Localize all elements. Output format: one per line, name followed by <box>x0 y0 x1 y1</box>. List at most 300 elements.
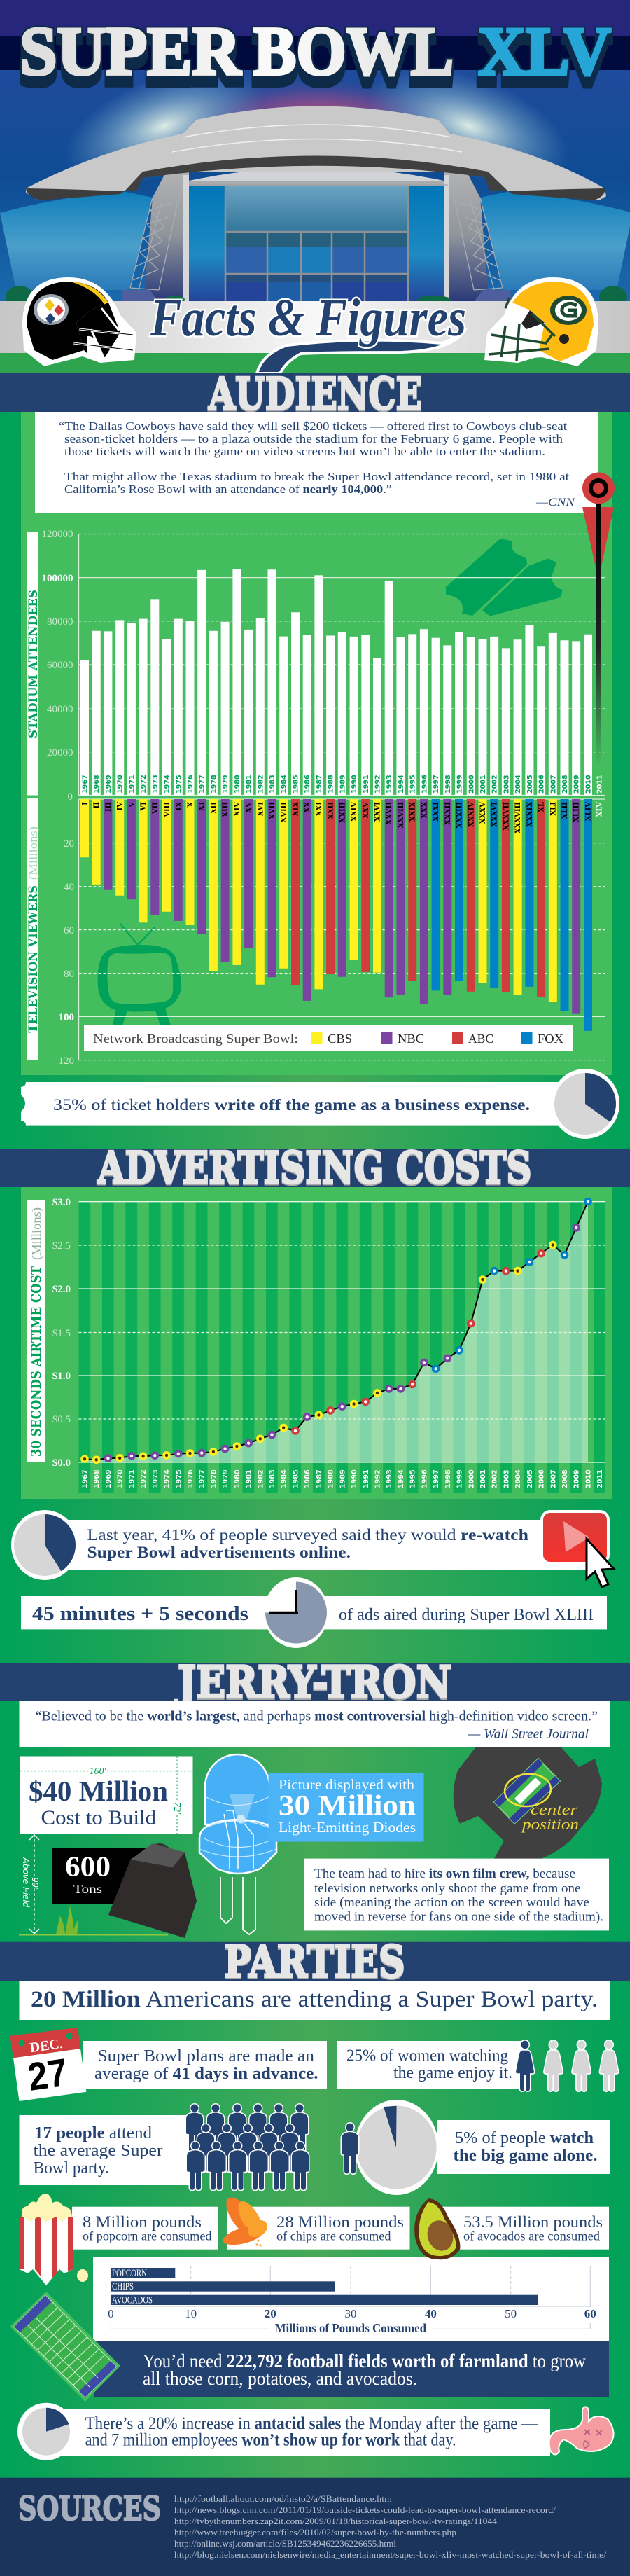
advertising heading: ADVERTISING COSTS <box>97 1142 532 1193</box>
year labels: 1980 <box>234 775 241 794</box>
year labels: 1984 <box>281 1469 288 1488</box>
title: SUPER <box>20 13 241 90</box>
x axis labels: 40 <box>425 2307 437 2320</box>
pie: 35 percent <box>551 1069 620 1139</box>
y axis labels: 80000 <box>47 616 73 628</box>
data points <box>82 1199 591 1462</box>
super bowl numerals: IX <box>175 802 183 810</box>
axis title: airtime cost <box>27 1200 46 1462</box>
year labels: 1974 <box>164 1469 171 1488</box>
film crew text box: television networks only shoot the game from one <box>314 1881 581 1896</box>
year labels: 1975 <box>175 1469 183 1488</box>
antacid callout: and 7 million employees won’t show up for work that day. <box>85 2431 456 2450</box>
year labels: 1993 <box>386 775 393 794</box>
title <box>20 13 611 90</box>
pounds consumed bar chart: Millions of Pounds Consumed <box>275 2321 426 2335</box>
year labels: 1969 <box>105 1469 113 1488</box>
axis title: television viewers: TELEVISION VIEWERS <box>27 885 41 1033</box>
super bowl numerals: XXVIII <box>398 802 405 828</box>
women enjoying box <box>337 2041 618 2091</box>
year labels: 1989 <box>339 1469 346 1488</box>
year labels: 2011 <box>596 1469 604 1488</box>
year labels: 1999 <box>456 775 463 794</box>
year labels: 1974 <box>164 775 171 794</box>
year labels: 2008 <box>561 775 569 794</box>
year labels: 1971 <box>128 1469 136 1488</box>
green section background <box>0 1663 630 1943</box>
year labels: 1986 <box>304 1469 312 1488</box>
year labels: 1972 <box>140 775 148 794</box>
super bowl numerals: XII <box>210 802 218 814</box>
year labels: 1984 <box>281 775 288 794</box>
icon: weight <box>108 1843 197 1938</box>
y axis labels: 20000 <box>47 747 73 759</box>
green section background <box>0 1149 630 1663</box>
swoosh <box>257 328 466 373</box>
weight box: Tons <box>74 1882 102 1896</box>
year labels: 2006 <box>538 1469 546 1488</box>
abc bars <box>291 799 545 997</box>
bar labels: CHIPS <box>112 2281 134 2292</box>
people per party box: the average Super <box>34 2142 162 2160</box>
year labels: 1972 <box>140 1469 148 1488</box>
year labels: 1967 <box>81 775 90 794</box>
year labels: 1995 <box>410 775 417 794</box>
super bowl numerals: XXVII <box>386 802 393 825</box>
bar labels <box>112 2268 153 2306</box>
x axis labels: 60 <box>584 2307 596 2320</box>
year labels: 1992 <box>374 775 382 794</box>
height above field marker <box>21 1834 41 1934</box>
icon: screen position blob: center <box>531 1801 578 1818</box>
super bowl numerals: XIV <box>234 802 241 816</box>
year labels: 1999 <box>456 1469 463 1488</box>
super bowl numerals: X <box>187 802 195 808</box>
parties heading bar <box>0 1942 630 1981</box>
year labels: 1971 <box>128 775 136 794</box>
axis title: television viewers: (Millions) <box>27 826 40 880</box>
super bowl numerals: XVIII <box>281 802 288 823</box>
super bowl numerals: IV <box>117 802 125 810</box>
cost to build box <box>20 1757 193 1834</box>
year labels: 1978 <box>210 1469 218 1488</box>
super bowl numerals: XXXIII <box>456 802 463 828</box>
y axis labels: 120 <box>59 1055 74 1067</box>
quote box: That might allow the Texas stadium to break the Super Bowl attendance record, set in 1980 at <box>64 470 569 483</box>
super bowl numerals: XLI <box>550 802 557 815</box>
cbs bars <box>80 799 557 1002</box>
sources list: http://football.about.com/od/histo2/a/SBattendance.htm <box>174 2493 392 2504</box>
super bowl numerals: XL <box>538 802 546 812</box>
x axis labels <box>108 2307 596 2320</box>
x axis labels: 30 <box>344 2307 357 2320</box>
year labels: 2001 <box>479 1469 487 1488</box>
led callout box <box>269 1773 424 1842</box>
year labels: 2002 <box>491 1469 499 1488</box>
year labels: 2005 <box>526 775 534 794</box>
year labels: 2006 <box>538 775 546 794</box>
bars <box>111 2268 538 2305</box>
callout: ad minutes <box>21 1577 607 1648</box>
axis title: television viewers <box>27 798 41 1060</box>
chips stat: of chips are consumed <box>276 2229 391 2243</box>
super bowl numerals: VIII <box>164 802 171 818</box>
year labels: 1983 <box>269 1469 276 1488</box>
year labels: 1994 <box>398 775 405 794</box>
callout: re-watch ads: Super Bowl advertisements online. <box>87 1544 351 1561</box>
led callout box: 30 Million <box>279 1789 416 1821</box>
sources list: http://blog.nielsen.com/nielsenwire/media_entertainment/super-bowl-xliv-most-watched-super-bowl-of-all-time/ <box>174 2549 606 2560</box>
year labels: 1996 <box>421 775 428 794</box>
year labels: 1987 <box>316 1469 323 1488</box>
year labels: 2010 <box>585 775 592 794</box>
year labels: 1970 <box>117 1469 125 1488</box>
television viewers chart <box>27 798 605 1067</box>
attendance bars <box>80 569 592 796</box>
year labels: 1985 <box>293 775 300 794</box>
parties heading: PARTIES <box>224 1936 405 1988</box>
year labels: 1967 <box>81 1469 90 1488</box>
super bowl numerals: XXXI <box>433 802 440 822</box>
green section background <box>0 373 630 1149</box>
year labels: 1992 <box>374 1469 382 1488</box>
super bowl numerals: XIII <box>222 802 230 817</box>
year labels: 1994 <box>398 1469 405 1488</box>
icon: four women <box>516 2041 618 2091</box>
y axis labels: 60 <box>64 925 74 936</box>
x axis labels: 20 <box>265 2307 276 2320</box>
legend: network broadcasting: CBS <box>328 1032 352 1046</box>
callout: re-watch ads <box>11 1510 614 1587</box>
cost to build box: 72′ <box>172 1802 182 1815</box>
sources list: http://www.treehugger.com/files/2010/02/super-bowl-by-the-numbers.php <box>174 2527 456 2537</box>
film crew text box: The team had to hire its own film crew, because <box>314 1867 575 1881</box>
year labels: 1969 <box>105 775 113 794</box>
callout: ad minutes: 45 minutes + 5 seconds <box>32 1603 248 1625</box>
chips stat: 28 Million pounds <box>276 2213 404 2231</box>
super bowl numerals: XXXIX <box>526 802 534 827</box>
year labels: 1970 <box>117 775 125 794</box>
icon: calendar: 27 <box>25 2050 70 2099</box>
y axis labels: $2.0 <box>52 1284 71 1295</box>
super bowl numerals: XXXV <box>479 802 487 824</box>
year labels: 2002 <box>491 775 499 794</box>
sources list: http://online.wsj.com/article/SB125349462236226655.html <box>174 2538 396 2549</box>
sources heading: SOURCES <box>18 2489 161 2528</box>
super bowl numerals: XXV <box>363 802 370 818</box>
sources list <box>174 2493 606 2560</box>
year labels: 1990 <box>351 1469 358 1488</box>
super bowl numerals: XXII <box>328 802 335 819</box>
quote box: — Wall Street Journal <box>468 1726 589 1741</box>
super bowl numerals: XXI <box>316 802 323 816</box>
year labels: 1991 <box>363 1469 370 1488</box>
year labels: 1977 <box>199 1469 206 1488</box>
bar labels: POPCORN <box>112 2268 147 2279</box>
pie: 41 percent <box>11 1510 78 1580</box>
super bowl numerals: XLIV <box>585 802 592 821</box>
super bowl numerals: XLIII <box>573 802 581 822</box>
y axis labels: $0.0 <box>52 1457 71 1469</box>
year labels: 1978 <box>210 775 218 794</box>
super bowl numerals: XXVI <box>374 802 382 822</box>
icon: steelers helmet <box>22 277 136 366</box>
cost line <box>85 1202 588 1460</box>
y axis labels: $1.0 <box>52 1371 71 1382</box>
chips stat <box>227 2207 410 2250</box>
year labels: 1991 <box>363 775 370 794</box>
x axis labels: 10 <box>185 2307 197 2320</box>
year labels: 1981 <box>246 775 253 794</box>
weight box: 600 <box>65 1850 111 1883</box>
party planning box <box>83 2041 327 2089</box>
super bowl numerals: II <box>93 802 101 808</box>
watching alone box <box>342 2100 610 2195</box>
quote box: “The Dallas Cowboys have said they will sell $200 tickets — offered first to Cowboys club-seat <box>59 420 567 433</box>
nbc bars <box>104 799 580 1014</box>
super bowl numerals: XXXIV <box>468 802 475 827</box>
super bowl numerals: V <box>128 802 136 808</box>
icon: pylon <box>582 472 615 766</box>
year labels: 1982 <box>257 1469 265 1488</box>
y axis labels: 100 <box>59 1012 74 1023</box>
year labels: 1993 <box>386 1469 393 1488</box>
quote box: —CNN <box>536 497 576 508</box>
film crew text box <box>304 1859 609 1930</box>
super bowl numerals: XIX <box>293 802 300 816</box>
year labels: 1973 <box>152 1469 160 1488</box>
height above field marker: Above Field <box>21 1857 31 1908</box>
pie: 5 percent <box>355 2100 439 2195</box>
super bowl numerals: III <box>105 802 113 812</box>
year labels: 1976 <box>187 1469 195 1488</box>
super bowl numerals: XVI <box>257 802 265 816</box>
y axis labels: $3.0 <box>52 1197 71 1208</box>
year labels <box>81 775 603 794</box>
year labels: 1980 <box>234 1469 241 1488</box>
led callout box: Picture displayed with <box>279 1776 415 1793</box>
icon: screen position blob: position <box>521 1815 579 1833</box>
year labels: 2003 <box>503 775 510 794</box>
women enjoying box: the game enjoy it. <box>393 2064 512 2082</box>
y axis labels: 60000 <box>47 660 73 671</box>
legend: network broadcasting: ABC <box>468 1032 493 1046</box>
year labels: 2007 <box>550 775 557 794</box>
cost to build box: $40 Million <box>29 1775 168 1807</box>
year labels: 2010 <box>585 1469 592 1488</box>
area under line <box>85 1202 588 1462</box>
super bowl numerals: XLII <box>561 802 569 819</box>
fox bars <box>432 799 592 1031</box>
title: XLV <box>478 13 611 90</box>
super bowl numerals: XXXVI <box>491 802 499 827</box>
stadium attendees chart <box>27 529 605 803</box>
y axis labels: $2.5 <box>52 1240 71 1252</box>
year labels: 2007 <box>550 1469 557 1488</box>
y axis labels: $0.5 <box>52 1414 71 1425</box>
audience heading bar <box>0 373 630 412</box>
year labels: 1973 <box>152 775 160 794</box>
year labels: 2011 <box>596 775 603 794</box>
weight box <box>52 1843 197 1938</box>
icon: clock <box>264 1577 328 1648</box>
avocados stat <box>442 2207 609 2250</box>
super bowl numerals: XX <box>304 802 312 813</box>
y axis labels: 100000 <box>42 573 73 584</box>
icon: calendar <box>10 2028 86 2101</box>
callout: ad minutes: of ads aired during Super Bowl XLIII <box>339 1606 594 1624</box>
bar labels: AVOCADOS <box>112 2294 153 2306</box>
y axis labels: 120000 <box>42 529 73 540</box>
film crew text box: side (meaning the action on the screen would have <box>314 1895 589 1910</box>
section: audience <box>0 368 630 1149</box>
super bowl numerals: VI <box>140 802 148 811</box>
headline box: 20 million: 20 Million Americans are attending a Super Bowl party. <box>31 1987 598 2012</box>
icon: popcorn box <box>20 2194 88 2285</box>
year labels: 2008 <box>561 1469 569 1488</box>
stadium centre glass <box>189 167 448 301</box>
popcorn stat: 8 Million pounds <box>83 2213 202 2231</box>
women enjoying box: 25% of women watching <box>346 2047 508 2065</box>
legend: network broadcasting: Network Broadcasting Super Bowl: <box>93 1032 298 1046</box>
icon: stomach <box>550 2407 613 2454</box>
y axis labels: 40000 <box>47 704 73 715</box>
super bowl numerals: XXX <box>421 802 428 818</box>
quote box: “Believed to be the world’s largest, and perhaps most controversial high-definition video screen.” <box>35 1708 598 1724</box>
cost to build box: Cost to Build <box>41 1807 157 1829</box>
year labels: 1997 <box>433 1469 440 1488</box>
people per party box: 17 people attend <box>34 2124 152 2142</box>
year labels: 1986 <box>304 775 312 794</box>
farmland callout: You’d need 222,792 football fields worth of farmland to grow <box>143 2350 586 2371</box>
year labels: 1975 <box>175 775 183 794</box>
y axis labels: $1.5 <box>52 1328 71 1339</box>
year labels: 1998 <box>444 775 452 794</box>
year labels: 1982 <box>257 775 265 794</box>
year labels: 2009 <box>573 775 581 794</box>
led callout box: Light-Emitting Diodes <box>279 1819 416 1836</box>
legend: network broadcasting: FOX <box>538 1032 564 1046</box>
axis title: stadium attendees: STADIUM ATTENDEES <box>27 590 41 738</box>
y axis labels <box>59 838 74 1067</box>
super bowl numerals: XLV <box>596 802 603 817</box>
icon: tickets <box>446 539 563 616</box>
year labels: 1998 <box>444 1469 452 1488</box>
facts banner strip <box>0 301 630 374</box>
legend: network broadcasting: NBC <box>398 1032 424 1046</box>
ticket banner: business expense: 35% of ticket holders write off the game as a business expense. <box>53 1096 530 1114</box>
axis title: stadium attendees <box>27 532 41 796</box>
year labels: 1968 <box>93 775 101 794</box>
avocados stat: 53.5 Million pounds <box>463 2213 603 2231</box>
section: advertising costs <box>0 1142 630 1663</box>
title: BOWL <box>253 13 454 90</box>
year labels: 1985 <box>293 1469 300 1488</box>
year labels: 1979 <box>222 1469 230 1488</box>
year labels: 2000 <box>468 775 475 794</box>
icon: tv <box>98 924 181 1025</box>
headline box: 20 million <box>20 1981 610 2020</box>
people per party box: Bowl party. <box>34 2159 109 2177</box>
quote box <box>35 412 598 513</box>
audience panel <box>21 412 612 1075</box>
year labels: 1983 <box>269 775 276 794</box>
year labels: 2001 <box>479 775 487 794</box>
year labels: 1968 <box>93 1469 101 1488</box>
year labels: 2004 <box>514 775 522 794</box>
super bowl numerals: XXIII <box>339 802 346 823</box>
year labels: 2009 <box>573 1469 581 1488</box>
green section background <box>0 1941 630 2478</box>
cost to build box: 160′ <box>89 1766 106 1777</box>
quote box: those tickets will watch the game on video screens but won’t be able to enter the stadium. <box>64 445 545 458</box>
watching alone box: 5% of people watch <box>455 2129 594 2147</box>
ticket banner: business expense <box>21 1069 620 1139</box>
farmland callout: all those corn, potatoes, and avocados. <box>143 2368 417 2389</box>
year labels: 2004 <box>514 1469 522 1488</box>
year labels: 1989 <box>339 775 346 794</box>
super bowl numerals: XXIV <box>351 802 358 822</box>
super bowl numerals: XXIX <box>410 802 417 822</box>
year labels: 1997 <box>433 775 440 794</box>
antacid callout <box>18 2403 613 2460</box>
year labels: 1977 <box>199 775 206 794</box>
header: stadium scene <box>0 0 630 308</box>
year labels: 1990 <box>351 775 358 794</box>
sources list: http://news.blogs.cnn.com/2011/01/19/outside-tickets-could-lead-to-super-bowl-attendance-record/ <box>174 2505 556 2515</box>
icon: avocado <box>414 2198 460 2259</box>
year labels: 1979 <box>222 775 230 794</box>
year labels: 1995 <box>410 1469 417 1488</box>
year labels: 2003 <box>503 1469 510 1488</box>
party planning box: average of 41 days in advance. <box>94 2065 318 2083</box>
audience heading: AUDIENCE <box>208 368 422 420</box>
y axis labels: 0 <box>67 791 73 803</box>
party planning box: Super Bowl plans are made an <box>98 2047 314 2065</box>
legend: network broadcasting <box>84 1025 573 1051</box>
icon: packers helmet <box>484 277 598 366</box>
super bowl numerals: XXXVII <box>503 802 510 830</box>
section: jerry-tron <box>0 1656 630 1943</box>
x axis labels: 0 <box>108 2307 114 2320</box>
super bowl numerals: I <box>81 802 90 805</box>
people per party box <box>20 2104 309 2190</box>
icon: chips <box>220 2193 270 2248</box>
quote box: season-ticket holders — to a plaza outside the stadium for the February 6 game. People with <box>64 432 564 445</box>
sources list: http://tvbythenumbers.zap2it.com/2009/01/18/historical-super-bowl-tv-ratings/11044 <box>174 2516 498 2526</box>
year labels: 1988 <box>328 775 335 794</box>
avocados stat: of avocados are consumed <box>463 2229 600 2243</box>
height above field marker: 90′ <box>30 1877 41 1889</box>
y axis labels: 40 <box>64 882 74 893</box>
super bowl numerals: XV <box>246 802 253 813</box>
popcorn stat <box>72 2207 218 2250</box>
y axis labels: 80 <box>64 969 74 980</box>
antacid callout: There’s a 20% increase in antacid sales the Monday after the game — <box>85 2414 538 2433</box>
super bowl numerals: XVII <box>269 802 276 819</box>
y axis labels <box>52 1197 71 1469</box>
farmland callout <box>94 2341 609 2397</box>
year labels: 1996 <box>421 1469 428 1488</box>
callout: re-watch ads: Last year, 41% of people surveyed said they would re-watch <box>87 1526 528 1544</box>
quote box <box>20 1701 610 1747</box>
super bowl numerals: VII <box>152 802 160 815</box>
popcorn stat: of popcorn are consumed <box>83 2229 211 2243</box>
icon: football field <box>10 2292 120 2402</box>
icon: grass <box>19 1906 168 1935</box>
year labels: 1987 <box>316 775 323 794</box>
facts and figures script title: Facts & Figures <box>150 289 466 347</box>
